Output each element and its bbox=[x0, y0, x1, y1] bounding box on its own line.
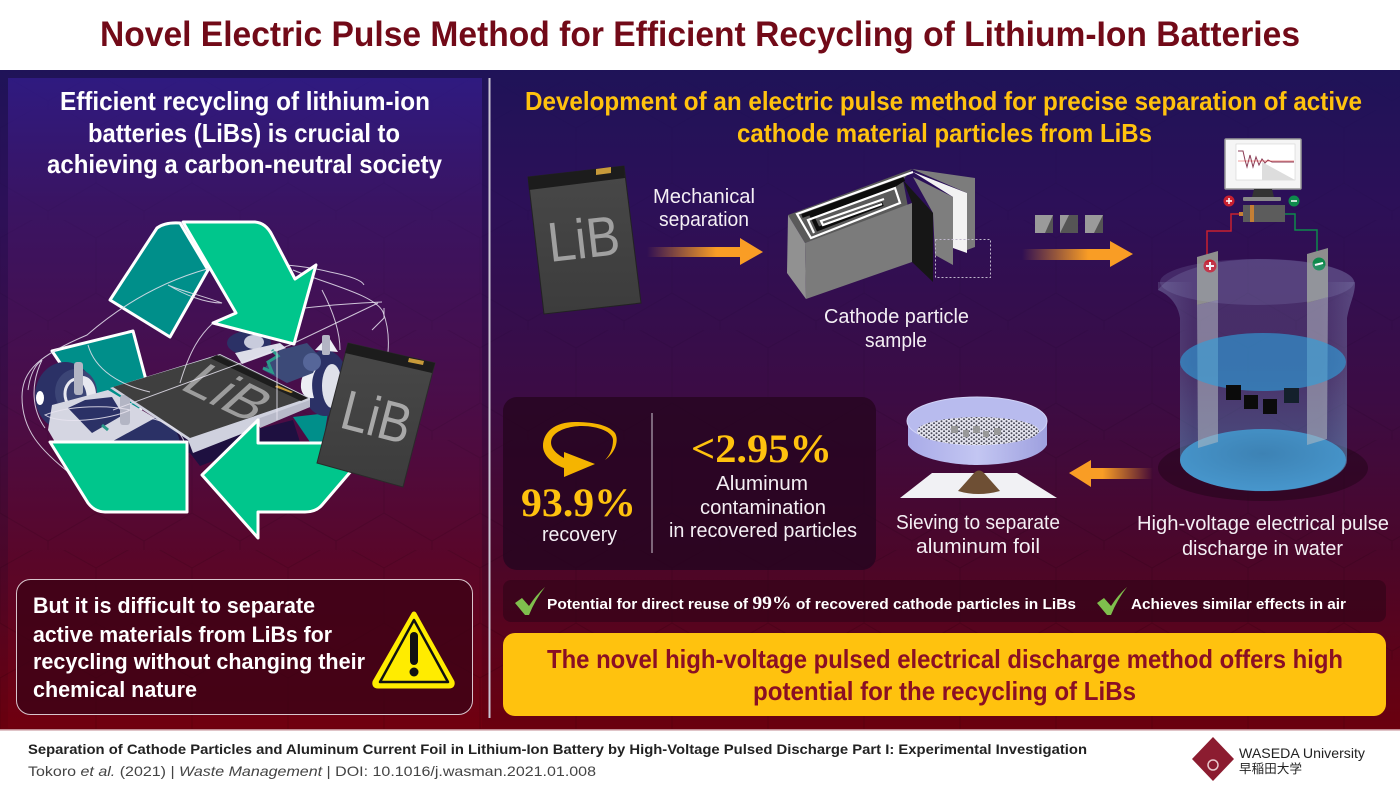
beaker body bbox=[1158, 259, 1355, 491]
stat: aluminum contamination: in recovered particles bbox=[669, 520, 857, 542]
header band bbox=[0, 0, 1400, 70]
chassis battery pack: LiB bbox=[169, 355, 287, 431]
right heading: Development of an electric pulse method for precise separation of active bbox=[525, 86, 1362, 116]
arrow: to beaker bbox=[1022, 241, 1133, 267]
logo: Waseda University bbox=[1192, 737, 1365, 781]
conclusion box: The novel high-voltage pulsed electrical discharge method offers high bbox=[547, 644, 1343, 674]
footer band bbox=[0, 729, 1400, 788]
particles in water bbox=[1226, 385, 1299, 414]
pulse source and terminals bbox=[1207, 196, 1317, 255]
electrodes bbox=[1197, 248, 1328, 448]
citation: Tokoro et al. (2021) | Waste Management | DOI: 10.1016/j.wasman.2021.01.008 bbox=[28, 763, 596, 779]
right heading bbox=[525, 86, 1362, 148]
conclusion box bbox=[503, 633, 1386, 716]
benefit: similar in air: Achieves similar effects in air bbox=[1131, 596, 1346, 613]
car outline bbox=[22, 264, 388, 475]
icon: gold recovery swoosh bbox=[543, 422, 617, 477]
stat: recovery bbox=[521, 480, 636, 546]
icon: warning triangle bbox=[375, 614, 452, 686]
chassis frame bbox=[48, 335, 338, 453]
recycle arrow: top right green bbox=[183, 222, 316, 344]
battery: LiB cell step 1: LiB bbox=[544, 203, 623, 274]
recycle arrow: bottom left green bbox=[50, 442, 187, 512]
stat: aluminum contamination: <2.95% bbox=[691, 426, 832, 471]
stat: aluminum contamination: contamination bbox=[700, 497, 826, 519]
icon: check bbox=[1097, 587, 1127, 615]
label: mechanical separation bbox=[653, 186, 755, 231]
beaker base water bbox=[1180, 429, 1346, 491]
title: Novel Electric Pulse Method for Efficient Recycling of Lithium-Ion Batteries bbox=[100, 15, 1300, 54]
stat: aluminum contamination bbox=[669, 426, 857, 542]
citation: Separation of Cathode Particles and Aluminum Current Foil in Lithium-Ion Battery by High-Voltage Pulsed Discharge Part I: Experimental Investigation bbox=[28, 741, 1087, 757]
label: discharge in water: discharge in water bbox=[1182, 538, 1343, 560]
panel: left heading bbox=[47, 86, 442, 179]
beaker rim bbox=[1160, 259, 1354, 305]
illustration: cathode particle sample bbox=[787, 169, 990, 299]
label: mechanical separation: separation bbox=[659, 209, 749, 231]
chassis battery pack bbox=[113, 355, 308, 438]
label: cathode particle sample bbox=[824, 306, 969, 352]
battery: LiB cell bbox=[317, 343, 435, 487]
label: discharge in water: High-voltage electrical pulse bbox=[1137, 513, 1389, 535]
icon: check bbox=[515, 587, 545, 615]
label: sieving bbox=[896, 512, 1060, 558]
logo: Waseda University: 早稲田大学 bbox=[1239, 761, 1302, 776]
recycle arrow: bottom right green bbox=[202, 420, 352, 538]
beaker shadow bbox=[1158, 435, 1368, 501]
right heading: cathode material particles from LiBs bbox=[737, 118, 1152, 148]
callout: difficulty of separating: recycling without changing their bbox=[33, 649, 365, 674]
vertical divider bbox=[488, 78, 490, 718]
recycle arrow: right teal fold bbox=[293, 413, 328, 442]
callout: difficulty of separating bbox=[16, 580, 472, 714]
label: sieving: Sieving to separate bbox=[896, 512, 1060, 534]
battery: LiB cell: LiB bbox=[335, 378, 419, 456]
callout: difficulty of separating: But it is difficult to separate bbox=[33, 593, 315, 618]
panel: left background bbox=[8, 78, 482, 728]
water surface bbox=[1180, 333, 1346, 391]
label: cathode particle sample: sample bbox=[865, 330, 927, 352]
label: sieving: aluminum foil bbox=[916, 536, 1040, 558]
arrow: to sieve bbox=[1069, 460, 1153, 487]
monitor with waveform bbox=[1225, 139, 1301, 201]
label: mechanical separation: Mechanical bbox=[653, 186, 755, 208]
conclusion box: potential for the recycling of LiBs bbox=[753, 676, 1136, 706]
panel: left heading: batteries (LiBs) is crucial to bbox=[88, 118, 400, 148]
callout: difficulty of separating: chemical nature bbox=[33, 677, 197, 702]
recycle arrow: left teal fold bbox=[52, 331, 150, 440]
recycle arrow: top teal fold bbox=[110, 223, 208, 337]
callout: difficulty of separating: active materials from LiBs for bbox=[33, 622, 332, 647]
chassis shadow bbox=[55, 420, 300, 466]
label: cathode particle sample: Cathode particle bbox=[824, 306, 969, 328]
stat: aluminum contamination: Aluminum bbox=[716, 473, 808, 495]
label: discharge in water bbox=[1137, 513, 1389, 560]
car wheels bbox=[35, 331, 348, 473]
battery: LiB cell step 1 bbox=[528, 166, 641, 314]
panel: left heading: achieving a carbon-neutral society bbox=[47, 149, 442, 179]
panel: results bbox=[503, 397, 876, 570]
panel: left heading: Efficient recycling of lithium-ion bbox=[60, 86, 430, 116]
arrow: to cathode sample bbox=[647, 238, 763, 265]
illustration: sieve bbox=[900, 397, 1057, 498]
icon: cathode particle squares bbox=[1035, 215, 1103, 233]
benefit: direct reuse: Potential for direct reuse of 99% of recovered cathode particles in LiBs bbox=[547, 593, 1076, 614]
illustration: recycling symbol with EV chassis and battery bbox=[22, 222, 435, 538]
stat: recovery: 93.9% bbox=[521, 480, 636, 525]
logo: Waseda University: WASEDA University bbox=[1239, 745, 1365, 761]
beaker side highlights bbox=[1158, 282, 1355, 491]
illustration: pulse discharge apparatus bbox=[1158, 139, 1368, 501]
stat: recovery: recovery bbox=[542, 524, 617, 546]
panel: benefits strip bbox=[503, 580, 1386, 622]
citation bbox=[28, 741, 1087, 779]
